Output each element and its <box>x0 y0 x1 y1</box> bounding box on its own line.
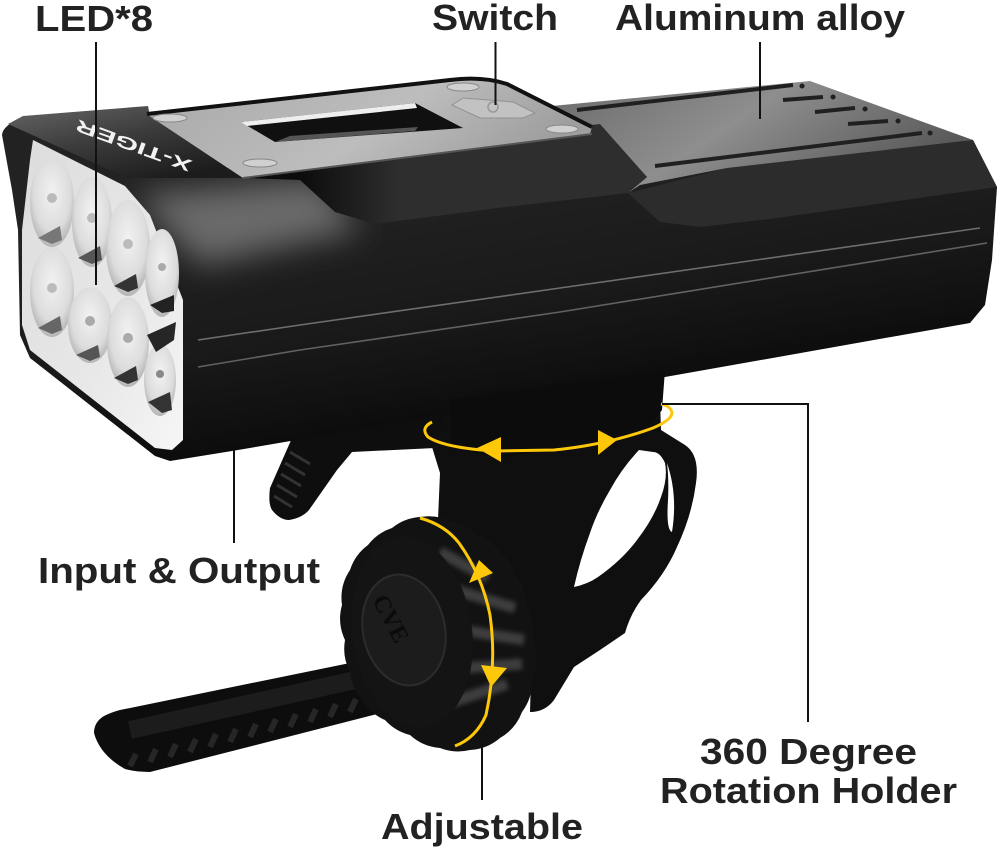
LED 1 <box>30 157 74 247</box>
body highlight <box>135 178 360 265</box>
LED 4 <box>145 229 179 317</box>
label: Adjustable: Adjustable <box>381 806 583 847</box>
right strap loop and stem <box>432 400 697 712</box>
yellow adjust arrow: knob <box>420 518 507 746</box>
LED 7 <box>107 297 149 387</box>
strap opening <box>574 450 666 587</box>
brand logo: X-TIGER <box>73 116 194 175</box>
yellow rotation arrow: 360 degree <box>425 404 672 462</box>
leader line: adjustable <box>481 740 483 800</box>
mount block under housing <box>450 370 665 458</box>
LED lens module <box>22 140 183 450</box>
clip lever <box>269 400 480 520</box>
power switch button <box>452 98 535 118</box>
LED 6 <box>68 287 112 363</box>
LED 3 <box>106 200 150 296</box>
display housing hump <box>243 124 647 224</box>
label: Input & Output: Input & Output <box>38 550 320 591</box>
lens reflector panel <box>22 140 183 450</box>
LED 8 <box>144 344 176 416</box>
body creases <box>198 228 987 367</box>
head top surface <box>8 106 243 178</box>
leader line: switch <box>494 42 496 105</box>
label: 360 Degree Rotation Holder: 360 Degree <box>700 731 917 772</box>
main black housing <box>2 118 997 461</box>
leader line: LED <box>95 42 97 285</box>
LED 5 <box>30 247 74 337</box>
knob ridge highlights <box>440 552 524 702</box>
leader line: rotation holder <box>662 404 808 722</box>
flashlight body <box>2 79 997 461</box>
label: 360 Degree Rotation Holder <box>660 731 957 811</box>
adjusting knob: CVE <box>367 591 413 648</box>
adjusting knob <box>339 516 537 751</box>
screws <box>153 114 187 122</box>
knob face <box>339 529 485 735</box>
LED 2 <box>72 177 112 267</box>
power icon <box>488 102 498 112</box>
brushed metal control plate <box>147 79 592 178</box>
display window <box>241 103 463 142</box>
strap tongue <box>94 663 385 772</box>
leader line: input and output <box>233 450 235 543</box>
dark wedge between LEDs <box>147 322 176 352</box>
rear upper side facet <box>628 140 997 227</box>
leader line: aluminum alloy <box>759 42 761 119</box>
label: 360 Degree Rotation Holder: Rotation Holder <box>660 770 957 811</box>
mount and strap assembly <box>94 400 697 772</box>
rear aluminum top plate <box>552 81 973 193</box>
strap slit <box>667 463 674 532</box>
